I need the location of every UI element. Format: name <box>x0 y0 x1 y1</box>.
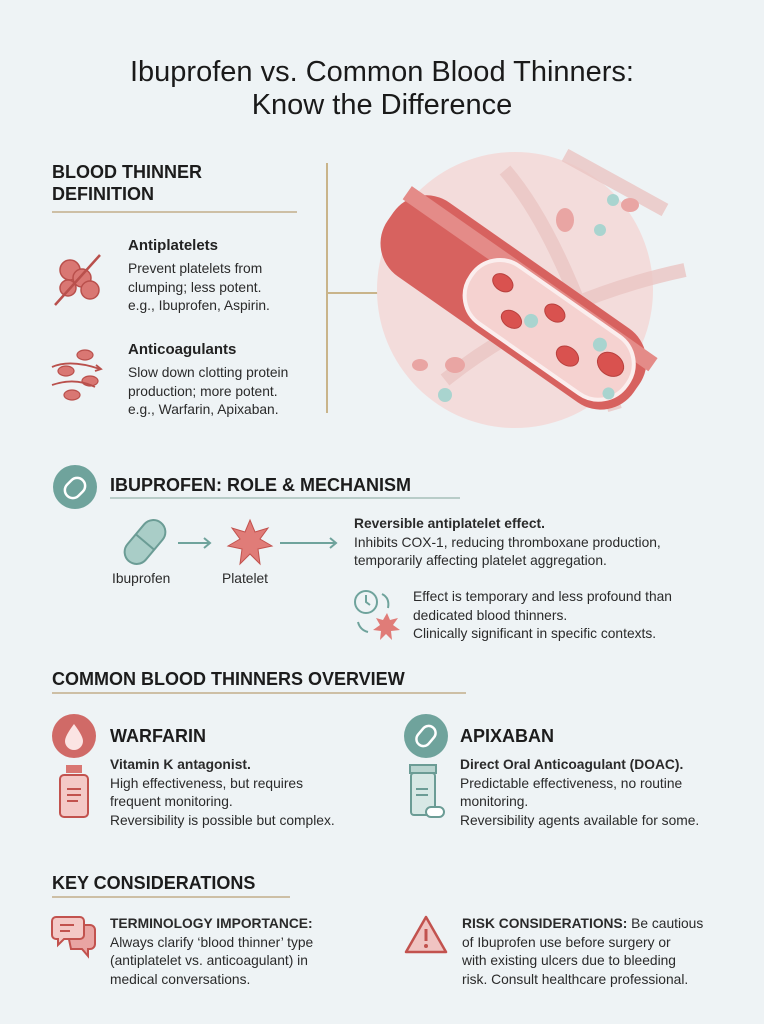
heading: ibuprofen role & mechanism <box>53 465 460 509</box>
panel: warfarin: frequent monitoring. <box>110 794 233 809</box>
connector line <box>326 163 378 413</box>
panel: apixaban: monitoring. <box>460 794 528 809</box>
panel: warfarin: Vitamin K antagonist. <box>110 757 251 772</box>
panel: terminology importance: (antiplatelet vs. anticoagulant) in <box>110 953 308 968</box>
text: anticoagulants <box>128 341 288 417</box>
text: antiplatelets: e.g., Ibuprofen, Aspirin. <box>128 298 270 313</box>
text: temporary effect <box>413 589 672 641</box>
panel: terminology importance: Always clarify ‘blood thinner’ type <box>110 934 313 950</box>
icon: drop circle <box>52 714 96 758</box>
diagram: ibuprofen to platelet: Ibuprofen <box>112 571 170 586</box>
heading: blood thinner definition: DEFINITION <box>52 184 154 204</box>
icon: pill bottle <box>409 764 445 818</box>
heading: blood thinner definition <box>52 162 202 204</box>
text: antiplatelets <box>128 237 270 313</box>
title <box>130 56 634 121</box>
panel: apixaban: APIXABAN <box>460 726 554 746</box>
icon: clock and platelet <box>354 590 400 640</box>
panel: warfarin: High effectiveness, but requires <box>110 776 303 790</box>
panel: risk considerations: RISK CONSIDERATIONS: Be cautious <box>462 916 703 931</box>
panel: risk considerations: risk. Consult healthcare professional. <box>462 972 688 986</box>
text: antiplatelets: Antiplatelets <box>128 237 218 254</box>
title: Ibuprofen vs. Common Blood Thinners: <box>130 56 634 88</box>
text: temporary effect: Clinically significant in specific contexts. <box>413 626 656 641</box>
text: antiplatelets: clumping; less potent. <box>128 280 261 294</box>
panel: terminology importance: medical conversations. <box>110 972 250 986</box>
text: anticoagulants: Anticoagulants <box>128 341 236 358</box>
text: anticoagulants: e.g., Warfarin, Apixaban. <box>128 402 279 417</box>
icon: speech bubbles <box>51 916 96 959</box>
panel: warfarin <box>52 714 335 828</box>
heading: common blood thinners overview: COMMON BLOOD THINNERS OVERVIEW <box>52 669 405 689</box>
panel: apixaban: Direct Oral Anticoagulant (DOAC). <box>460 757 683 772</box>
text: temporary effect: dedicated blood thinners. <box>413 608 567 622</box>
panel: risk considerations: with existing ulcers due to bleeding <box>462 953 676 968</box>
panel: terminology importance <box>51 916 313 986</box>
icon: warning <box>404 916 448 954</box>
heading: ibuprofen role & mechanism: IBUPROFEN: ROLE & MECHANISM <box>110 475 411 495</box>
title: Know the Difference <box>252 89 512 121</box>
icon: pill circle <box>53 465 97 509</box>
text: reversible antiplatelet effect: Reversible antiplatelet effect. <box>354 516 545 531</box>
text: reversible antiplatelet effect: temporarily affecting platelet aggregation. <box>354 553 607 568</box>
text: anticoagulants: Slow down clotting protein <box>128 365 288 380</box>
panel: warfarin: Reversibility is possible but complex. <box>110 812 335 828</box>
icon: bottle <box>59 765 89 818</box>
panel: terminology importance: TERMINOLOGY IMPORTANCE: <box>110 916 313 931</box>
text: temporary effect: Effect is temporary and less profound than <box>413 589 672 604</box>
panel: apixaban <box>404 714 699 828</box>
heading: blood thinner definition: BLOOD THINNER <box>52 162 202 182</box>
panel: apixaban: Reversibility agents available for some. <box>460 812 699 828</box>
icon: capsule circle <box>404 714 448 758</box>
heading: key considerations: KEY CONSIDERATIONS <box>52 873 255 893</box>
panel: risk considerations <box>404 916 703 987</box>
panel: apixaban: Predictable effectiveness, no routine <box>460 776 682 790</box>
illustration: blood vessel <box>377 149 686 428</box>
panel: risk considerations: of Ibuprofen use before surgery or <box>462 934 671 950</box>
text: antiplatelets: Prevent platelets from <box>128 261 262 276</box>
diagram: ibuprofen to platelet: Platelet <box>222 571 268 586</box>
icon: antiplatelets <box>54 254 101 306</box>
icon: anticoagulants <box>52 349 103 401</box>
text: reversible antiplatelet effect <box>354 516 661 568</box>
text: reversible antiplatelet effect: Inhibits COX-1, reducing thromboxane production, <box>354 534 661 550</box>
panel: warfarin: WARFARIN <box>110 726 206 746</box>
text: anticoagulants: production; more potent. <box>128 384 278 398</box>
diagram: ibuprofen to platelet <box>112 518 338 586</box>
